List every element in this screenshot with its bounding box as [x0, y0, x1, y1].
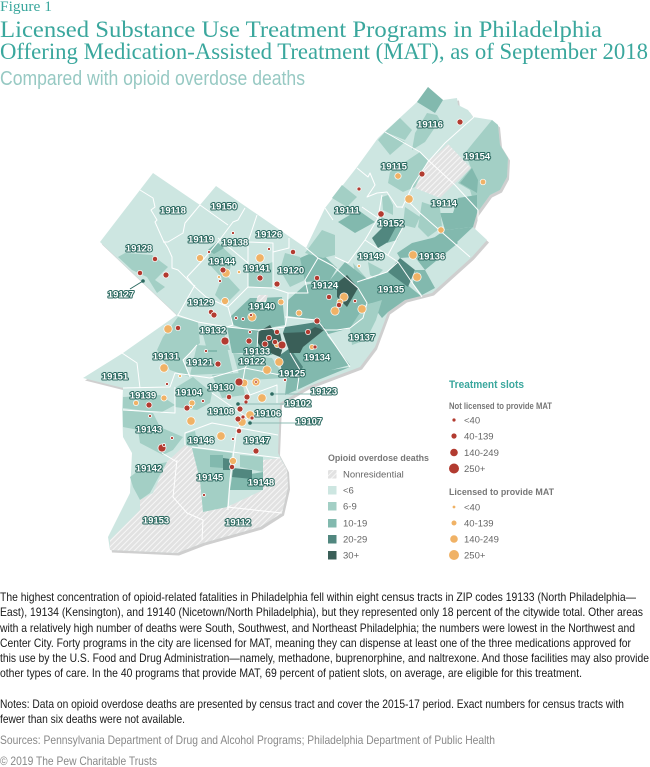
ZIP code labels: 19124: [312, 280, 339, 292]
legend: treatment slots: Not licensed to provide MAT: [449, 401, 552, 411]
legend: opioid overdose deaths: Nonresidential: [343, 470, 404, 480]
census tracts shaded by overdose deaths: [118, 87, 508, 512]
ZIP code labels: 19123: [311, 386, 337, 398]
ZIP code labels: 19149: [358, 252, 384, 262]
ZIP code labels: 19115: [381, 162, 408, 172]
legend: treatment slots: Treatment slots: [449, 379, 524, 391]
legend: treatment slots: 40-139: [464, 518, 494, 530]
map base: fewer than 6 deaths: [83, 87, 508, 553]
ZIP code labels: 19144: [209, 256, 236, 268]
ZIP code labels: 19104: [176, 388, 203, 398]
ZIP code labels: 19135: [378, 284, 405, 296]
treatment programs licensed to provide MAT: [133, 173, 486, 465]
ZIP code labels: 19143: [136, 424, 162, 436]
body text: [0, 590, 649, 680]
ZIP code labels: 19148: [248, 478, 274, 488]
legend: opioid overdose deaths: [328, 453, 429, 562]
legend: treatment slots: <40: [464, 416, 480, 426]
legend: treatment slots: 250+: [464, 464, 486, 475]
ZIP code labels: 19138: [222, 238, 248, 248]
ZIP code labels: 19137: [349, 332, 375, 344]
legend: opioid overdose deaths: 10-19: [343, 518, 367, 530]
ZIP code labels: 19131: [153, 352, 180, 362]
legend: treatment slots: <40: [464, 502, 480, 514]
ZIP code labels: 19146: [188, 436, 214, 446]
ZIP code labels: 19106: [255, 408, 281, 420]
ZIP code labels: [102, 120, 491, 528]
sources: Sources: Pennsylvania Department of Drug and Alcohol Programs; Philadelphia Department of Public Health: [0, 733, 495, 747]
notes: [0, 697, 624, 726]
ZIP code labels: 19140: [249, 302, 275, 312]
legend: treatment slots: 40-139: [464, 432, 494, 442]
ZIP code labels: 19129: [188, 298, 214, 308]
title: [0, 17, 648, 65]
ZIP code labels: 19119: [188, 234, 214, 246]
ZIP code labels: 19128: [126, 244, 152, 254]
legend: treatment slots: Licensed to provide MAT: [449, 487, 554, 497]
legend: treatment slots: 140-249: [464, 448, 499, 459]
ZIP code labels: 19121: [187, 358, 214, 368]
map shadow: [85, 90, 510, 556]
ZIP code labels: 19150: [211, 202, 237, 212]
ZIP code labels: 19145: [197, 472, 224, 484]
subtitle: Compared with opioid overdose deaths: [0, 68, 305, 90]
legend: opioid overdose deaths: 6-9: [343, 502, 357, 512]
ZIP code labels: 19127: [108, 290, 134, 300]
ZIP code labels: 19132: [200, 326, 226, 336]
notes: fewer than six deaths were not available.: [0, 712, 185, 726]
ZIP code labels: 19126: [256, 230, 282, 240]
ZIP code labels: 19151: [102, 372, 129, 382]
title: Offering Medication-Assisted Treatment (MAT), as of September 2018: [0, 39, 648, 65]
ZIP code labels: 19147: [244, 436, 270, 446]
legend: treatment slots: 250+: [464, 550, 486, 562]
ZIP code labels: 19139: [130, 390, 156, 402]
ZIP code boundaries: [122, 117, 478, 540]
ZIP code labels: 19133: [244, 346, 270, 358]
legend: opioid overdose deaths: <6: [343, 486, 354, 496]
treatment programs not licensed to provide MAT: [137, 119, 463, 496]
ZIP code labels: 19125: [279, 368, 306, 380]
ZIP code labels: 19118: [160, 206, 186, 216]
ZIP code labels: 19112: [225, 518, 251, 528]
ZIP code labels: 19136: [419, 252, 445, 262]
nonresidential hatched areas: [110, 144, 471, 553]
ZIP code labels: 19142: [136, 464, 162, 474]
ZIP code labels: 19141: [244, 264, 271, 274]
ZIP code labels: 19153: [143, 516, 169, 526]
ZIP code labels: 19102: [285, 398, 311, 410]
ZIP code labels: 19134: [304, 352, 331, 364]
leader lines: [130, 279, 312, 425]
legend: treatment slots: [449, 379, 554, 562]
ZIP code labels: 19154: [464, 152, 491, 162]
ZIP code labels: 19122: [239, 356, 265, 368]
legend: treatment slots: 140-249: [464, 534, 499, 546]
legend: opioid overdose deaths: 20-29: [343, 534, 367, 546]
ZIP code labels: 19107: [296, 416, 322, 428]
ZIP code labels: 19116: [417, 120, 443, 130]
ZIP code labels: 19114: [431, 198, 458, 210]
ZIP code labels: 19111: [334, 206, 360, 216]
ZIP code labels: 19130: [208, 382, 234, 394]
map of Philadelphia: [83, 87, 510, 556]
legend: opioid overdose deaths: Opioid overdose deaths: [328, 453, 429, 463]
legend: opioid overdose deaths: 30+: [343, 550, 360, 562]
ZIP code labels: 19108: [208, 406, 234, 418]
ZIP code labels: 19152: [378, 218, 404, 230]
title: Licensed Substance Use Treatment Programs in Philadelphia: [0, 17, 603, 43]
ZIP code labels: 19120: [278, 266, 304, 276]
